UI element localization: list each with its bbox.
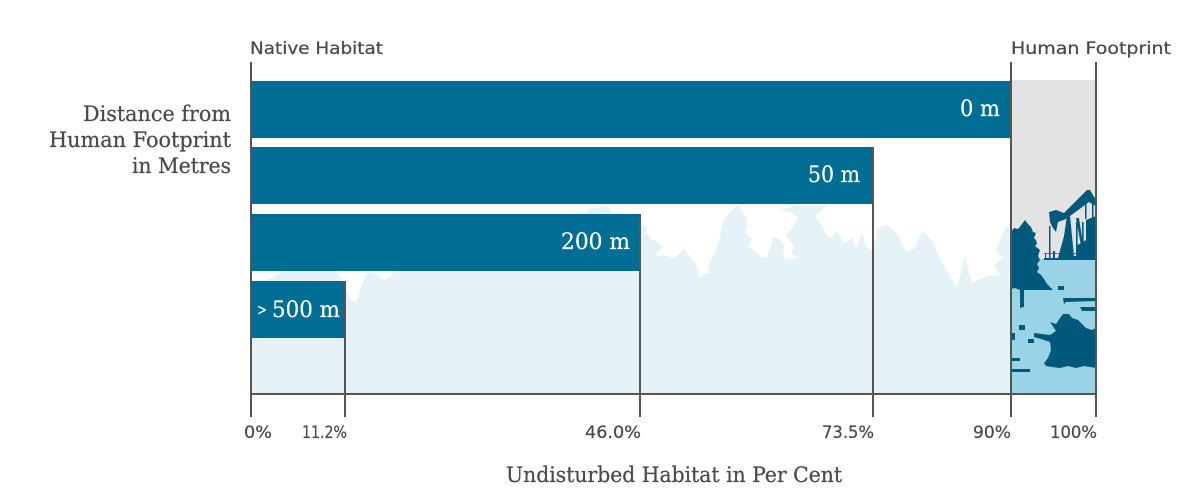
bar: over 500 m — [251, 281, 345, 338]
bar: over 500 m: 500 m — [272, 298, 340, 323]
bar: 50 m: 50 m — [808, 163, 860, 188]
x axis tick labels: 90% — [973, 423, 1011, 443]
bar: over 500 m: > — [257, 300, 267, 319]
x axis tick labels: 73.5% — [822, 423, 874, 443]
x axis tick labels: 46.0% — [585, 423, 641, 443]
x axis title: Undisturbed Habitat in Per Cent — [506, 463, 843, 487]
bar: 0 m: 0 m — [960, 97, 1000, 122]
heading: human footprint: Human Footprint — [1011, 39, 1171, 59]
axis lines and ticks — [251, 62, 1096, 417]
y axis title: in Metres — [132, 154, 231, 178]
y axis title: Human Footprint — [49, 128, 232, 152]
x axis tick labels — [244, 423, 1097, 443]
bar: 200 m: 200 m — [561, 230, 630, 255]
ground — [1011, 259, 1096, 394]
heading: native habitat: Native Habitat — [250, 39, 383, 59]
x axis tick labels: 0% — [244, 423, 272, 443]
icon: fallen tree crown — [1034, 314, 1096, 368]
y axis title — [49, 102, 232, 178]
tree stumps and logs — [1011, 286, 1096, 372]
bar: 200 m — [251, 214, 640, 271]
bar: 50 m — [251, 147, 873, 204]
icon: conifer tree — [1011, 220, 1053, 308]
human footprint panel — [1011, 80, 1096, 394]
native habitat forest silhouette — [251, 205, 1011, 394]
icon: oil pumpjack — [1044, 190, 1096, 260]
x axis tick labels: 100% — [1050, 423, 1097, 443]
sky — [1011, 80, 1096, 261]
bar: 0 m — [251, 81, 1011, 138]
x axis tick labels: 11.2% — [302, 423, 347, 443]
y axis title: Distance from — [83, 102, 231, 126]
